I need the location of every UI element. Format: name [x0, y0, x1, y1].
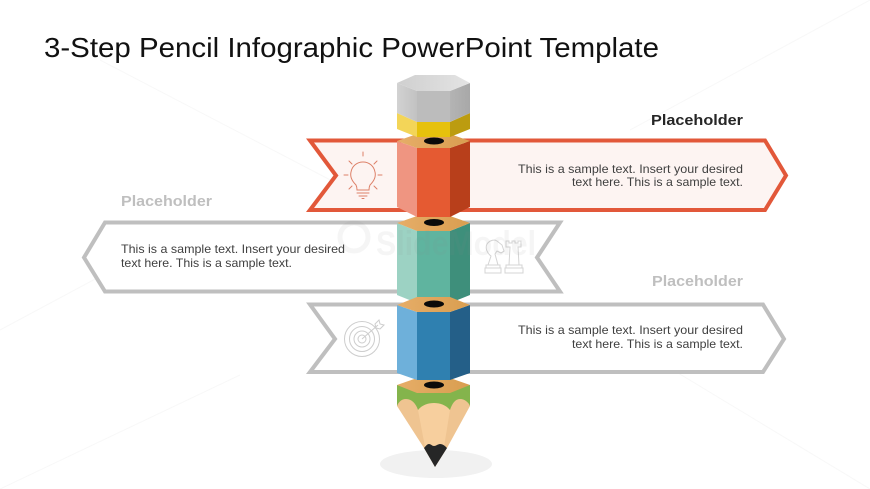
step 3 heading: Placeholder: [652, 273, 743, 290]
step 3 text: text here. This is a sample text.: [572, 337, 743, 351]
step 2 text: [121, 242, 345, 270]
pencil: [380, 75, 492, 478]
step 1 text: This is a sample text. Insert your desired: [518, 162, 743, 176]
eraser: [397, 75, 470, 122]
pencil tip: [397, 378, 470, 467]
step 3 text: This is a sample text. Insert your desired: [518, 323, 743, 337]
title: 3-Step Pencil Infographic PowerPoint Template: [44, 32, 659, 63]
blue segment: [397, 297, 470, 380]
watermark: SlideModel: [376, 225, 536, 263]
icon: chess pieces: [485, 240, 523, 273]
step 1 text: text here. This is a sample text.: [572, 175, 743, 189]
step 1 text: [518, 162, 743, 189]
step 1 heading: Placeholder: [651, 112, 743, 129]
step 2 heading: Placeholder: [121, 193, 212, 210]
step 2 text: text here. This is a sample text.: [121, 256, 292, 270]
orange segment: [397, 134, 470, 217]
icon: light bulb: [344, 152, 382, 198]
ferrule: [397, 113, 470, 137]
step 3 text: [518, 323, 743, 351]
icon: target: [344, 320, 384, 356]
step 2 text: This is a sample text. Insert your desired: [121, 242, 345, 256]
teal segment: [397, 216, 470, 303]
panel: step 1 banner: [310, 112, 786, 210]
ground shadow: [380, 450, 492, 478]
panel: step 3 banner: [310, 273, 784, 372]
panel: step 2 banner: [84, 193, 560, 292]
